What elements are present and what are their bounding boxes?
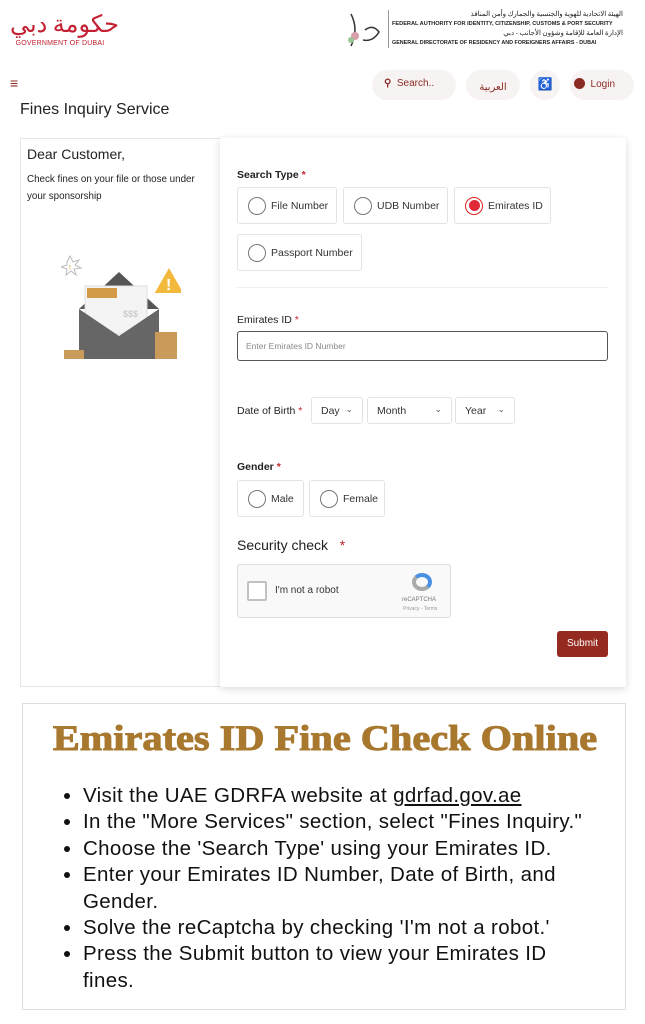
heading: Security check: Security check *	[237, 537, 345, 553]
options: search type: UDB Number	[377, 200, 439, 212]
field: Date of Birth: ⌄	[434, 404, 442, 414]
input: Emirates ID: Enter Emirates ID Number	[246, 341, 346, 351]
logo: Government of Dubai: GOVERNMENT OF DUBAI	[16, 40, 104, 47]
field: Date of Birth: Day	[321, 404, 340, 416]
label: Emirates ID: Emirates ID *	[237, 314, 299, 326]
recaptcha widget: reCAPTCHA	[402, 597, 436, 603]
icon: menu: ≡	[10, 75, 18, 91]
icon: envelope with fines: !	[166, 277, 171, 294]
text: description: Check fines on your file or those under your sponsorship	[27, 174, 195, 202]
field: Date of Birth: ⌄	[497, 404, 505, 414]
field: Date of Birth	[237, 397, 515, 424]
options: search type: Emirates ID	[488, 200, 543, 212]
logo: GDRFA: FEDERAL AUTHORITY FOR IDENTITY, CITIZENSHIP, CUSTOMS & PORT SECURITY	[392, 20, 613, 26]
field: Date of Birth: Year	[465, 404, 486, 416]
options: gender: Male	[271, 492, 294, 504]
title: Emirates ID Fine Check Online: Emirates ID Fine Check Online	[53, 718, 597, 758]
button: Submit: Submit	[567, 638, 598, 649]
icon: envelope with fines	[61, 255, 181, 359]
panel: intro	[20, 138, 222, 687]
recaptcha widget: Privacy - Terms	[403, 606, 437, 612]
options: search type	[237, 187, 551, 271]
text: Dear Customer: Dear Customer,	[27, 146, 125, 162]
panel: instructions	[22, 703, 626, 1010]
nav buttons	[372, 70, 634, 100]
icon: envelope with fines: $$$	[123, 309, 138, 319]
list: steps: Press the Submit button to view your Emirates ID	[83, 942, 546, 965]
list: steps: Solve the reCaptcha by checking 'I'm not a robot.'	[83, 916, 550, 939]
field: Date of Birth: Date of Birth *	[237, 405, 302, 417]
recaptcha widget: I'm not a robot	[275, 585, 339, 596]
list: steps	[64, 784, 582, 992]
nav buttons: ♿	[538, 77, 552, 91]
nav buttons: Login	[591, 79, 615, 90]
logo: Government of Dubai: حكومة دبي	[10, 4, 119, 39]
options: gender	[237, 480, 385, 517]
list: steps: Gender.	[83, 890, 158, 913]
logo: GDRFA: الهيئة الاتحادية للهوية والجنسية والجمارك وأمن المنافذ	[471, 9, 623, 19]
heading: Fines Inquiry Service: Fines Inquiry Service	[20, 101, 169, 118]
options: gender: Female	[343, 492, 378, 504]
logo: GDRFA: الإدارة العامة للإقامة وشؤون الأجانب - دبي	[503, 28, 623, 38]
input: Emirates ID	[237, 331, 608, 361]
list: steps: fines.	[83, 969, 134, 992]
label: Search Type: Search Type *	[237, 169, 306, 181]
nav buttons: ⚲ Search..	[384, 78, 434, 89]
list: steps: Enter your Emirates ID Number, Date of Birth, and	[83, 863, 556, 886]
field: Date of Birth: ⌄	[345, 404, 353, 414]
label: Gender: Gender *	[237, 461, 281, 473]
nav buttons: العربية	[479, 78, 507, 93]
list: steps: Choose the 'Search Type' using your Emirates ID.	[83, 837, 552, 860]
options: search type: Passport Number	[271, 246, 353, 258]
recaptcha widget	[237, 564, 451, 618]
icon: envelope with fines: !	[69, 265, 71, 272]
button: Submit	[557, 631, 608, 657]
logo: GDRFA	[348, 9, 623, 48]
list: steps: Visit the UAE GDRFA website at gdrfad.gov.ae	[83, 784, 522, 807]
logo: GDRFA: GENERAL DIRECTORATE OF RESIDENCY AND FOREIGNERS AFFAIRS - DUBAI	[392, 40, 596, 46]
panel: form card	[220, 138, 626, 687]
options: search type: File Number	[271, 200, 328, 212]
field: Date of Birth: Month	[377, 404, 406, 416]
list: steps: In the "More Services" section, select "Fines Inquiry."	[83, 810, 582, 833]
